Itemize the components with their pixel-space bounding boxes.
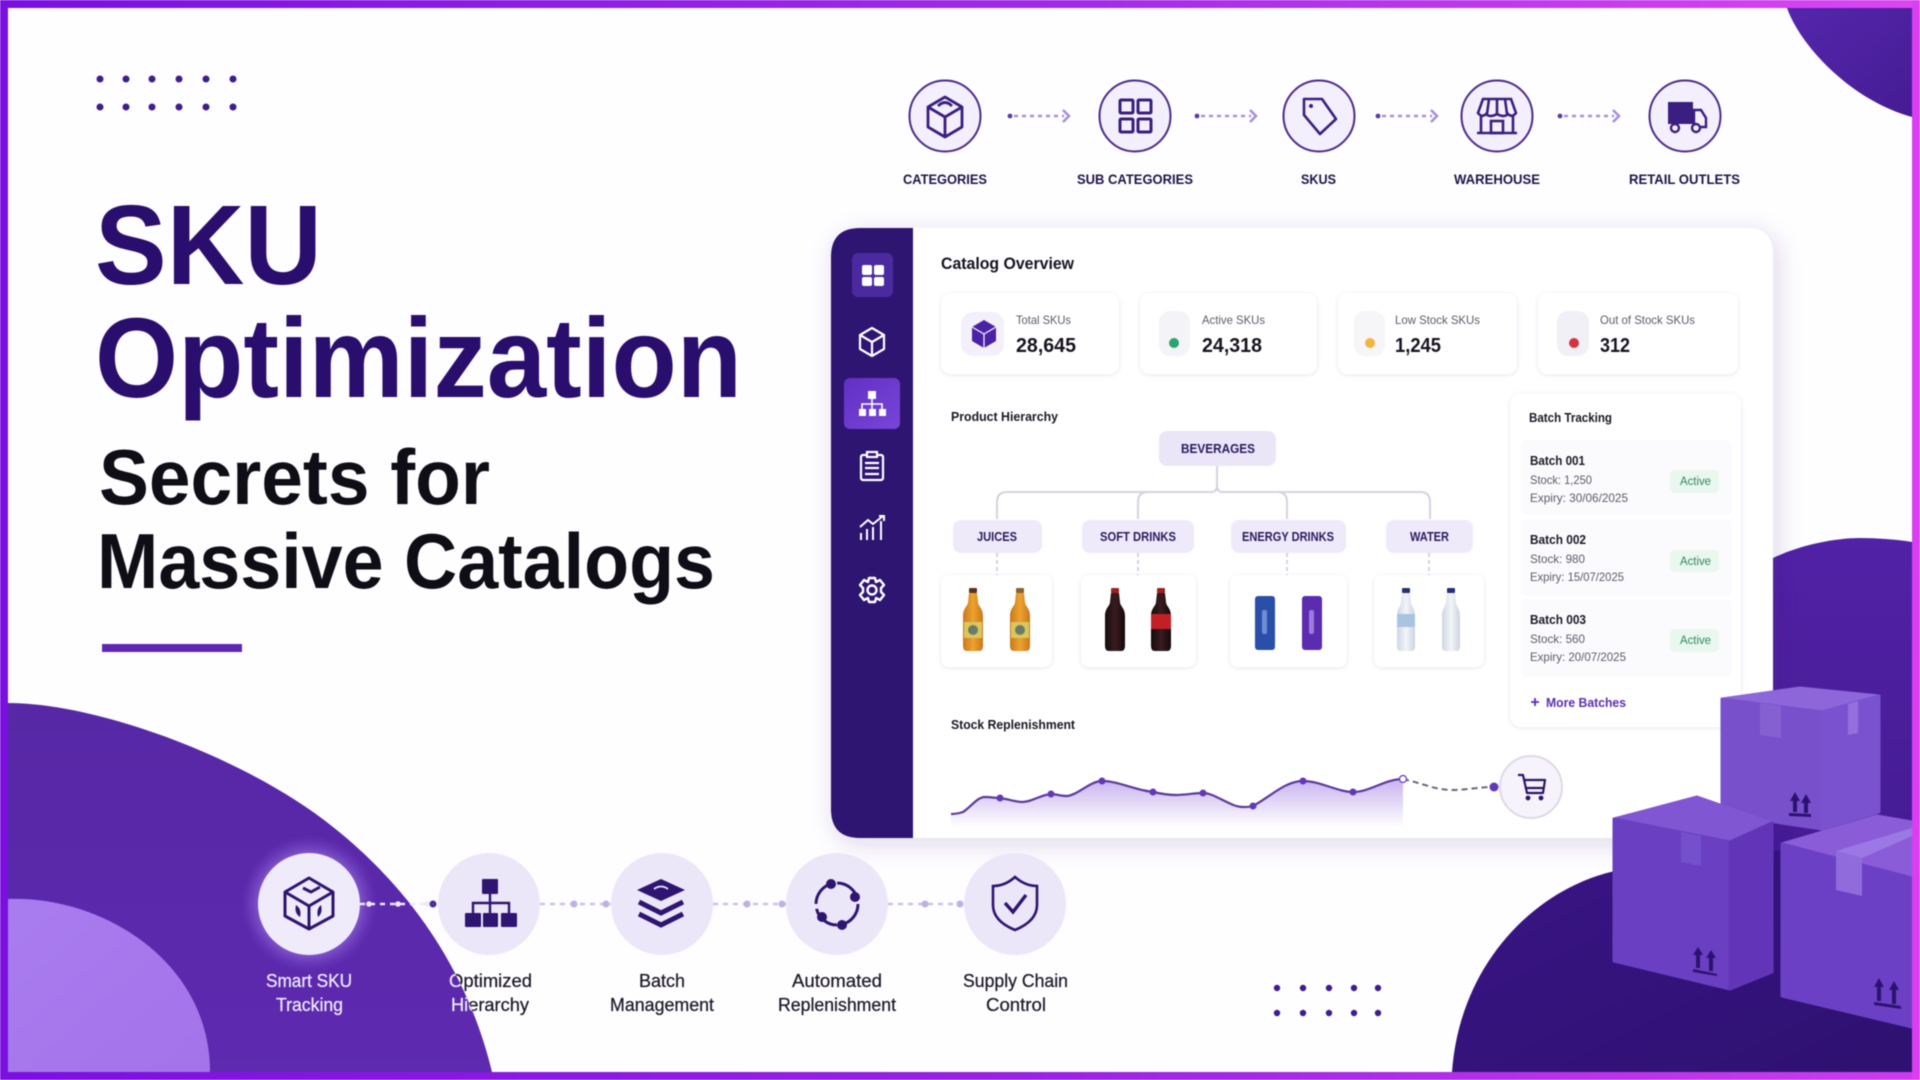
batch 001: Stock: 1,250 xyxy=(1530,473,1592,487)
stat card: total skus: 28,645 xyxy=(1016,335,1076,357)
stat card: out of stock skus: 312 xyxy=(1600,335,1630,357)
step: retail outlets: RETAIL OUTLETS xyxy=(1629,172,1740,187)
item: optimized hierarchy: Hierarchy xyxy=(451,995,529,1015)
batch 002: Expiry: 15/07/2025 xyxy=(1530,570,1624,584)
title: Optimization xyxy=(95,295,742,421)
item: optimized hierarchy: Hierarchy xyxy=(451,995,529,1015)
stat card: total skus xyxy=(941,293,1119,374)
item: optimized hierarchy: Optimized xyxy=(449,971,532,991)
node: energy drinks xyxy=(1231,520,1346,553)
dashboard panel xyxy=(831,228,1773,838)
stat card: low stock skus xyxy=(1338,293,1517,374)
section: product hierarchy xyxy=(941,409,1484,667)
box: bottom left xyxy=(1614,797,1772,989)
stat card: active skus: 24,318 xyxy=(1202,335,1262,357)
decorative dot grid: top left xyxy=(96,76,236,110)
heading: Product Hierarchy xyxy=(951,409,1059,424)
arrow xyxy=(1195,110,1256,122)
icon: dashboard xyxy=(852,253,893,297)
step: warehouse: WAREHOUSE xyxy=(1454,172,1540,187)
stat card: low stock skus: Low Stock SKUs xyxy=(1395,313,1480,327)
stat card: active skus xyxy=(1140,293,1317,374)
batch 003: Stock: 560 xyxy=(1530,632,1585,646)
heading: catalog overview: Catalog Overview xyxy=(941,255,1074,273)
icon: gear xyxy=(860,578,884,602)
arrow xyxy=(1558,110,1619,122)
step: skus xyxy=(1284,80,1354,187)
step: categories xyxy=(903,80,987,187)
product card: energy drinks xyxy=(1230,575,1347,667)
step: sub categories: SUB CATEGORIES xyxy=(1077,172,1193,187)
decorative dot grid: bottom xyxy=(1274,985,1381,1016)
batch 001: Batch 001 xyxy=(1530,454,1585,468)
node: water: WATER xyxy=(1410,530,1449,544)
batch 001: Expiry: 30/06/2025 xyxy=(1530,491,1628,505)
item: batch management: Batch xyxy=(639,971,685,991)
step: skus: SKUS xyxy=(1301,172,1336,187)
batch 002: Stock: 980 xyxy=(1530,552,1585,566)
icon: cart xyxy=(1500,756,1562,818)
batch 003: Expiry: 20/07/2025 xyxy=(1530,650,1626,664)
node: soft drinks xyxy=(1082,520,1194,553)
batch 003: Active xyxy=(1680,635,1711,647)
subtitle xyxy=(97,433,715,605)
node: juices: JUICES xyxy=(977,530,1017,544)
batch 001 xyxy=(1521,440,1732,515)
item: batch management xyxy=(610,853,714,1015)
node: water xyxy=(1386,520,1473,553)
stat card: total skus: Total SKUs xyxy=(1016,313,1071,327)
box: bottom right xyxy=(1782,816,1912,1027)
title underline xyxy=(102,644,242,652)
connectors xyxy=(997,466,1430,575)
step: retail outlets xyxy=(1629,80,1740,187)
item: smart sku tracking xyxy=(258,853,360,1015)
item: smart sku tracking: Smart SKU xyxy=(266,971,352,991)
batch 002: Active xyxy=(1680,556,1711,568)
icon: chart xyxy=(860,516,884,540)
item: automated replenishment xyxy=(778,853,896,1015)
subtitle: Secrets for xyxy=(99,433,490,521)
item: smart sku tracking: Tracking xyxy=(276,995,343,1015)
step: categories: CATEGORIES xyxy=(903,172,987,187)
item: optimized hierarchy xyxy=(438,853,540,1015)
section: stock replenishment xyxy=(951,717,1562,827)
item: automated replenishment: Replenishment xyxy=(778,995,896,1015)
area chart xyxy=(951,776,1498,827)
box: top xyxy=(1722,688,1879,829)
batch 001: Active xyxy=(1680,476,1711,488)
arrow xyxy=(1376,110,1437,122)
item: automated replenishment: Automated xyxy=(792,971,882,991)
batch 003 xyxy=(1521,599,1732,677)
top flow: categories to retail outlets xyxy=(903,80,1740,187)
item: optimized hierarchy: Optimized xyxy=(449,971,532,991)
section: batch tracking: Batch Tracking xyxy=(1529,410,1612,425)
section: stock replenishment: Stock Replenishment xyxy=(951,717,1076,732)
node: energy drinks: ENERGY DRINKS xyxy=(1242,530,1334,544)
item: supply chain control xyxy=(963,853,1068,1015)
title xyxy=(95,182,742,421)
panel base xyxy=(831,228,1773,838)
step: warehouse xyxy=(1454,80,1540,187)
batch 002 xyxy=(1521,519,1732,596)
cardboard boxes xyxy=(1614,688,1912,1027)
product card: soft drinks xyxy=(1081,575,1196,667)
icon: hierarchy active xyxy=(844,378,900,429)
stat card: low stock skus: 1,245 xyxy=(1395,335,1441,357)
stat card: out of stock skus: Out of Stock SKUs xyxy=(1600,313,1695,327)
node: beverages xyxy=(1159,431,1276,466)
icon: cube xyxy=(860,328,884,356)
connectors xyxy=(360,900,964,908)
item: supply chain control: Supply Chain xyxy=(963,971,1068,991)
stat card: out of stock skus xyxy=(1538,293,1738,374)
title: SKU xyxy=(95,182,322,308)
stat card: active skus: Active SKUs xyxy=(1202,313,1265,327)
more batches link: More Batches xyxy=(1546,695,1626,710)
step: sub categories xyxy=(1077,80,1193,187)
sidebar xyxy=(831,228,913,838)
section: batch tracking xyxy=(1510,393,1741,727)
item: supply chain control: Control xyxy=(986,995,1046,1015)
bottom benefits row xyxy=(258,853,1068,1015)
arrow xyxy=(1008,110,1069,122)
icon: clipboard xyxy=(861,452,883,480)
subtitle: Massive Catalogs xyxy=(97,517,715,605)
product card: juices xyxy=(941,575,1052,667)
batch 003: Batch 003 xyxy=(1530,613,1586,627)
batch 002: Batch 002 xyxy=(1530,533,1586,547)
node: beverages: BEVERAGES xyxy=(1181,442,1255,456)
product card: water xyxy=(1374,575,1484,667)
node: juices xyxy=(953,520,1042,553)
node: soft drinks: SOFT DRINKS xyxy=(1100,530,1176,544)
item: batch management: Management xyxy=(610,995,714,1015)
